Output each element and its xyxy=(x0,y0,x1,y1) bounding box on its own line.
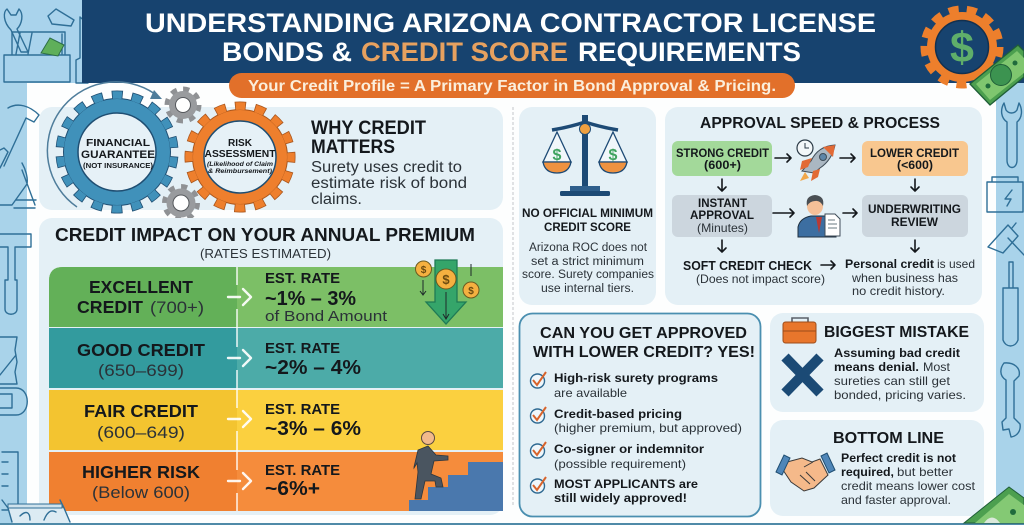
left decorative strip with tools xyxy=(0,0,88,523)
row: fair credit: (600–649) xyxy=(97,423,185,442)
gear: financial guarantee: GUARANTEE xyxy=(81,149,155,161)
gear: financial guarantee: (NOT INSURANCE) xyxy=(83,163,153,170)
box: underwriting review: REVIEW xyxy=(891,215,939,229)
subtitle pill xyxy=(229,73,795,98)
checklist item 4: still widely approved! xyxy=(554,491,687,505)
text: why credit matters: estimate risk of bond xyxy=(311,175,467,192)
icon: small gear bottom xyxy=(165,187,197,219)
heading: can you get approved: CAN YOU GET APPROVED xyxy=(540,325,747,342)
box: lower credit xyxy=(862,141,968,176)
icon: falling rate arrow with coins: $ xyxy=(442,272,450,287)
gear: risk assessment: (Likelihood of Claim xyxy=(207,162,274,168)
row arrows and divider xyxy=(228,267,251,511)
checklist item 3: (possible requirement) xyxy=(554,457,686,471)
row: good credit: EST. RATE xyxy=(265,341,340,357)
icon: header gear with dollar xyxy=(924,10,1000,84)
text: biggest mistake: means denial. xyxy=(834,360,919,374)
row: good credit: GOOD CREDIT xyxy=(77,340,205,360)
heading: can you get approved: WITH LOWER CREDIT? YES! xyxy=(533,344,755,361)
panel: approval speed and process xyxy=(665,107,982,305)
flow arrows xyxy=(718,154,919,269)
checklist item 2 xyxy=(530,407,742,435)
box: instant approval: APPROVAL xyxy=(690,208,754,222)
text: personal credit: Personal credit xyxy=(845,257,934,271)
heading: no official minimum: CREDIT SCORE xyxy=(544,220,631,234)
icon: header gear with dollar: $ xyxy=(950,24,974,72)
box: strong credit: STRONG CREDIT xyxy=(676,146,770,160)
gear: risk assessment: RISK xyxy=(228,138,253,149)
text: soft credit check xyxy=(683,259,825,286)
icon: balance scales: $ xyxy=(553,147,562,164)
heading: no official minimum: NO OFFICIAL MINIMUM xyxy=(522,206,653,220)
text: why credit matters: Surety uses credit to xyxy=(311,159,462,176)
heading: can you get approved xyxy=(533,325,755,361)
checklist item 4 xyxy=(530,477,698,505)
box: lower credit: LOWER CREDIT xyxy=(870,146,960,160)
row: excellent credit: ~1% – 3% xyxy=(265,288,356,310)
box: strong credit xyxy=(672,141,772,176)
box: underwriting review xyxy=(862,195,968,237)
text: bottom line: credit means lower cost xyxy=(841,479,976,493)
panel: no official minimum credit score xyxy=(519,107,656,305)
checklist item 2: (higher premium, but approved) xyxy=(554,421,742,435)
text: arizona roc note xyxy=(522,242,654,295)
row: excellent credit xyxy=(49,267,503,327)
text: biggest mistake: bonded, pricing varies. xyxy=(834,388,966,402)
text: arizona roc note: score. Surety companies xyxy=(522,269,654,281)
gear: financial guarantee: FINANCIAL xyxy=(86,137,151,149)
title xyxy=(145,8,876,67)
subtitle pill: Your Credit Profile = A Primary Factor in Bond Approval & Pricing. xyxy=(248,78,776,95)
text: bottom line: but better xyxy=(897,465,953,479)
text: personal credit xyxy=(845,257,975,298)
row: excellent credit: CREDIT xyxy=(77,297,143,317)
heading: why credit matters: MATTERS xyxy=(311,137,395,158)
panel: can you get approved xyxy=(520,314,760,516)
title: REQUIREMENTS xyxy=(578,37,801,67)
title: BONDS & xyxy=(222,37,352,67)
heading: no official minimum xyxy=(522,206,653,234)
row: good credit: (650–699) xyxy=(98,361,184,380)
box: instant approval xyxy=(672,195,772,237)
box: strong credit: (600+) xyxy=(704,158,741,172)
row: higher risk: ~6%+ xyxy=(265,478,320,500)
note: rates estimated: (RATES ESTIMATED) xyxy=(200,246,331,261)
header band xyxy=(82,0,1024,83)
heading: why credit matters xyxy=(311,118,426,158)
icon: balance scales: $ xyxy=(609,147,618,164)
checklist item 4: MOST APPLICANTS are xyxy=(554,477,698,491)
icon: falling rate arrow with coins: $ xyxy=(468,286,474,297)
text: personal credit: when business has xyxy=(851,271,958,285)
box: instant approval: INSTANT xyxy=(698,196,748,210)
text: bottom line xyxy=(841,451,976,507)
row: excellent credit: of Bond Amount xyxy=(265,309,387,325)
icon: dollar bill top right xyxy=(970,45,1024,105)
icon: falling rate arrow with coins xyxy=(416,260,479,324)
right decorative strip with tools xyxy=(987,83,1024,523)
title: UNDERSTANDING ARIZONA CONTRACTOR LICENSE xyxy=(145,8,876,38)
checklist item 1: High-risk surety programs xyxy=(554,371,718,385)
checklist item 1: are available xyxy=(554,386,627,400)
row: excellent credit: EST. RATE xyxy=(265,271,340,287)
row: excellent credit: EXCELLENT xyxy=(89,277,193,297)
icon: person climbing stairs xyxy=(409,432,503,511)
heading: credit impact: CREDIT IMPACT ON YOUR ANNUAL PREMIUM xyxy=(55,224,475,245)
icon: toolbox bottom left xyxy=(2,500,70,523)
icon: briefcase xyxy=(783,318,816,343)
gear: risk assessment: ASSESSMENT xyxy=(204,148,276,160)
title: CREDIT SCORE xyxy=(361,37,568,67)
checklist item 3 xyxy=(530,442,704,471)
icon: small gear top xyxy=(168,90,198,120)
icon: underwriter with document xyxy=(798,195,840,237)
row: fair credit: ~3% – 6% xyxy=(265,418,361,440)
icon: handshake xyxy=(776,453,835,491)
box: lower credit: (<600) xyxy=(897,158,933,172)
row: excellent credit: (700+) xyxy=(150,298,204,317)
row: higher risk: EST. RATE xyxy=(265,463,340,479)
panel: why credit matters xyxy=(39,82,503,219)
checklist item 1 xyxy=(530,371,718,400)
text: arizona roc note: Arizona ROC does not xyxy=(529,242,648,254)
text: biggest mistake: Assuming bad credit xyxy=(834,346,960,360)
heading: bottom line: BOTTOM LINE xyxy=(833,430,944,447)
panel: biggest mistake xyxy=(770,313,984,412)
text: bottom line: and faster approval. xyxy=(841,493,951,507)
text: bottom line: Perfect credit is not xyxy=(841,451,956,465)
text: why credit matters xyxy=(311,159,467,208)
text: soft credit check: (Does not impact score) xyxy=(696,272,825,286)
heading: why credit matters: WHY CREDIT xyxy=(311,118,426,139)
icon: dollar bill bottom right xyxy=(964,487,1024,523)
row: higher risk: (Below 600) xyxy=(92,483,190,502)
dashed column divider xyxy=(512,107,514,505)
panel: bottom line xyxy=(770,420,984,516)
text: personal credit: no credit history. xyxy=(852,284,945,298)
text: arizona roc note: set a strict minimum xyxy=(531,256,644,268)
icon: balance scales xyxy=(543,115,627,196)
text: biggest mistake: sureties can still get xyxy=(834,374,951,388)
panel: credit impact on annual premium xyxy=(39,218,503,515)
text: arizona roc note: use internal tiers. xyxy=(541,283,634,295)
text: why credit matters: claims. xyxy=(311,191,362,208)
row: fair credit: EST. RATE xyxy=(265,402,340,418)
box: underwriting review: UNDERWRITING xyxy=(868,202,961,216)
row: higher risk xyxy=(49,452,503,511)
text: biggest mistake xyxy=(834,346,966,402)
icon: clock and rocket xyxy=(797,140,835,181)
text: biggest mistake: Most xyxy=(923,360,951,374)
checklist item 3: Co-signer or indemnitor xyxy=(554,442,704,456)
text: personal credit: is used xyxy=(937,257,975,271)
text: bottom line: required, xyxy=(841,465,894,479)
icon: cross mark xyxy=(785,357,820,393)
row: good credit: ~2% – 4% xyxy=(265,357,361,379)
row: fair credit: FAIR CREDIT xyxy=(84,401,198,421)
box: instant approval: (Minutes) xyxy=(697,221,748,235)
gear: risk assessment: & Reimbursement) xyxy=(208,169,272,175)
heading: biggest mistake: BIGGEST MISTAKE xyxy=(824,324,969,341)
diagram: interlocking gears xyxy=(47,82,291,219)
icon: falling rate arrow with coins: $ xyxy=(421,265,427,276)
gear: financial guarantee xyxy=(60,95,174,209)
checklist item 2: Credit-based pricing xyxy=(554,407,682,421)
row: higher risk: HIGHER RISK xyxy=(82,462,200,482)
row: good credit xyxy=(49,328,503,388)
heading: approval speed: APPROVAL SPEED & PROCESS xyxy=(700,115,940,132)
row: fair credit xyxy=(49,390,503,450)
bottom rule xyxy=(0,523,1024,525)
gear: risk assessment xyxy=(189,106,291,208)
text: soft credit check: SOFT CREDIT CHECK xyxy=(683,259,812,273)
